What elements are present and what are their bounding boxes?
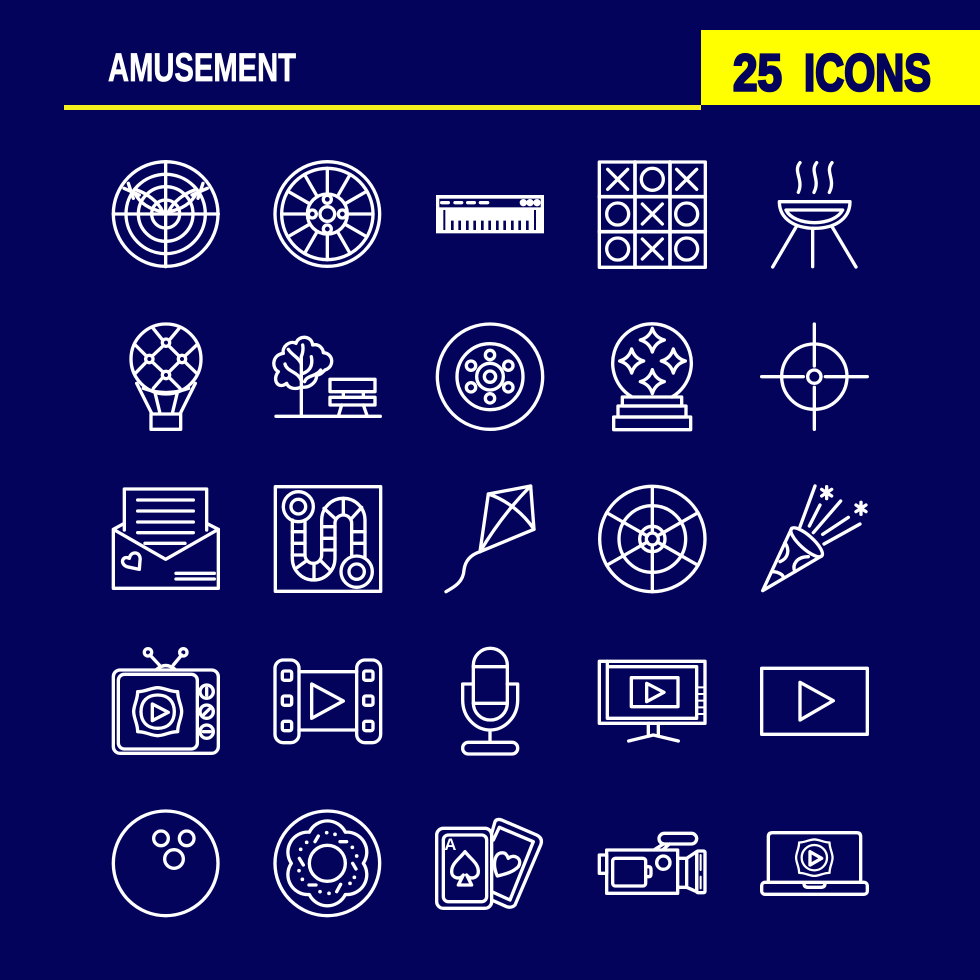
badge text: 25 icons: 25 [733, 44, 782, 102]
icon: love letter envelope [113, 489, 218, 588]
icon: film reel wheel [437, 324, 543, 429]
icon: crystal ball [613, 324, 691, 430]
icon: hot air balloon [131, 324, 201, 429]
icon: retro television [113, 649, 218, 753]
icon: video camera [599, 833, 705, 893]
header rule [64, 105, 701, 110]
badge text: 25 icons: ICONS [804, 44, 931, 102]
icon: dartboard [113, 162, 218, 267]
icon: laptop with video badge [762, 833, 867, 894]
icon: kite [446, 486, 534, 592]
icon: playing cards: A [444, 835, 456, 854]
icon: board game [275, 487, 381, 591]
icon: tic-tac-toe board [599, 162, 705, 267]
icon: tree and park bench [274, 337, 380, 416]
badge text: 25 icons [733, 44, 931, 102]
icon: playing cards [437, 819, 541, 908]
icon: wheel of fortune [600, 486, 705, 592]
icon: party popper [763, 486, 866, 591]
icon: desktop monitor with video [599, 661, 705, 741]
icon: film strip with play button [275, 660, 381, 743]
icon: electronic keyboard [436, 195, 544, 233]
icon: roulette wheel [275, 162, 380, 266]
title: AMUSEMENT [108, 46, 296, 90]
badge background [701, 30, 980, 105]
icon: crosshair target [762, 324, 867, 429]
icon: donut [275, 811, 380, 916]
icon: video player [762, 668, 867, 734]
icon: microphone [463, 648, 518, 754]
icon: bowling ball [113, 811, 218, 916]
icon: barbecue grill [773, 163, 856, 267]
